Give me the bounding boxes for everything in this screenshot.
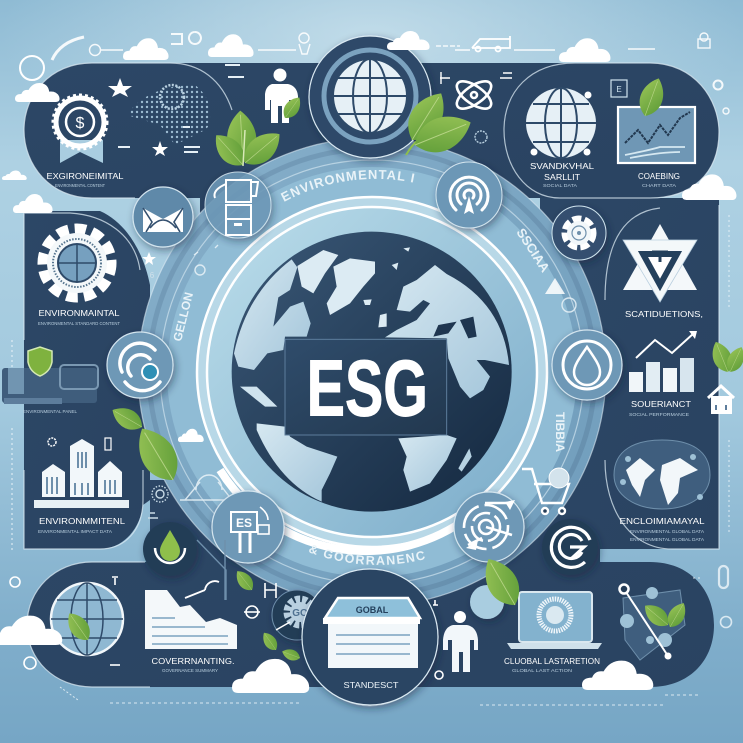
icon circle: G logo <box>542 519 598 575</box>
bottom center circle: building <box>302 569 438 705</box>
leaves: left <box>108 402 187 489</box>
sublabel: GOVERNANCE SUMMARY <box>162 668 218 673</box>
right small dashed decor <box>60 215 732 705</box>
continent: south america <box>257 423 337 502</box>
sublabel: ENVIRONMENTAL CONTENT <box>55 183 105 188</box>
dotted map <box>127 85 211 145</box>
speech bubble <box>470 585 504 619</box>
panel: bottom-left document chart <box>145 581 237 673</box>
continent: africa <box>398 435 457 492</box>
dark panel: top band with two pills <box>24 63 719 215</box>
panel: bottom-right network <box>620 584 685 660</box>
icon circle: badge <box>272 590 322 640</box>
icon circle: target <box>454 492 524 562</box>
ESG label: ESG <box>307 344 428 433</box>
panel: top-left content <box>46 65 244 188</box>
ring text: left: GELLON <box>170 291 196 343</box>
ring text: social: SSCIAA <box>513 225 553 275</box>
icon circle: envelope <box>133 187 193 247</box>
sublabel: ENVIRONMENTAL GLOBAL DATA <box>630 529 704 534</box>
label: SOUERIANCT <box>631 399 691 409</box>
leaf: chart <box>635 75 669 120</box>
label: CLUOBAL LASTARETION <box>504 656 600 666</box>
icon circle: wifi signal <box>436 162 502 228</box>
leaves: bottom small <box>232 567 302 663</box>
label: COAEBING <box>638 172 680 181</box>
leaves: top-right sprig <box>399 85 477 160</box>
device with shield <box>2 347 98 414</box>
label: SVANDKVHAL <box>530 162 595 171</box>
dark panel: left <box>24 211 150 549</box>
label: ENVIRONMMITENL <box>39 516 125 526</box>
ring text: environmental: ENVIRONMENTAL I <box>280 170 414 202</box>
label: EXGIRONEIMITAL <box>46 171 124 181</box>
sublabel: ENVIRONMENTAL STANDARD CONTENT <box>38 321 120 326</box>
icon: gear <box>44 230 110 296</box>
label line 2: SARLLIT <box>544 173 580 182</box>
top person <box>265 68 298 123</box>
icon circle: water drop ring <box>552 330 622 400</box>
ring faint icons <box>180 245 576 500</box>
icon: globe <box>526 88 596 158</box>
bottom center circle: building: GOBAL <box>356 605 389 615</box>
panel: top-right globe <box>526 88 596 188</box>
decorative top strip icons <box>52 32 729 114</box>
translucent outer ring <box>138 138 606 606</box>
ring text: governance: & GOORRANENC <box>309 545 425 565</box>
continent: north america <box>234 259 311 370</box>
ring text: right lower: TIBBIA <box>553 412 567 452</box>
leaves: top-left sprout <box>208 110 288 173</box>
continent: dark inland seas <box>433 317 477 338</box>
label: ENCLOIMIAMAYAL <box>620 516 705 526</box>
panel: right bar chart <box>629 331 697 417</box>
label: ENVIRONMAINTAL <box>38 308 120 318</box>
leaves: bottom-right <box>640 599 690 631</box>
continent: madagascar <box>458 448 472 472</box>
leaves: right edge <box>707 338 743 375</box>
dark panel: right <box>540 198 719 549</box>
label: COVERRNANTING. <box>152 656 234 666</box>
sublabel: ENVIRONMENTAL IMPACT DATA <box>38 529 112 534</box>
cloud in ring <box>178 429 204 442</box>
continent: greenland <box>327 258 375 315</box>
panel: bottom-left globe <box>51 583 123 655</box>
label: SCATIDUETIONS, <box>625 309 703 319</box>
continent: small islands <box>363 247 410 327</box>
leaf: globe <box>62 608 95 645</box>
sublabel 2: ENVIRONMENTAL GLOBAL DATA <box>630 537 704 542</box>
panel: left gear content: 6 <box>150 271 155 280</box>
sublabel: CHART DATA <box>642 183 676 188</box>
panel: top-right chart: E <box>616 85 622 94</box>
panel: right world map <box>614 440 710 542</box>
leaf: large bottom <box>476 552 528 612</box>
ESG label <box>285 339 447 435</box>
icon: star emblem <box>623 224 697 302</box>
device with shield: ENVIRONMENTAL PANEL <box>23 409 77 414</box>
icon circle: ESG sign <box>212 491 284 563</box>
icon circle: flower gear <box>552 206 606 260</box>
panel: laptop <box>504 592 602 673</box>
icon: dollar gear badge: $ <box>76 115 85 132</box>
panel: top-right chart <box>611 80 695 188</box>
icon circle: ESG sign: ES <box>236 516 252 530</box>
panel: left buildings <box>34 438 129 534</box>
icon circle: spiral <box>107 332 173 398</box>
truck icon <box>436 36 510 52</box>
dark panel: bottom <box>27 480 714 687</box>
continent: central america <box>240 387 277 407</box>
continent: arctic islands <box>297 250 338 293</box>
gear small <box>148 486 226 600</box>
bottom person <box>443 611 478 672</box>
sublabel: GLOBAL LAST ACTION <box>512 668 572 673</box>
icon: house <box>708 386 734 414</box>
globe <box>232 232 512 512</box>
top circle: globe <box>309 36 431 158</box>
bottom center circle: building: STANDESCT <box>344 680 398 690</box>
bright ring around globe <box>196 196 548 551</box>
icon: stars <box>108 78 168 156</box>
leaf: person <box>279 94 305 122</box>
panel: right star <box>623 224 703 319</box>
icon: shopping cart <box>522 468 569 514</box>
sublabel: SOCIAL PERFORMANCE <box>629 412 689 417</box>
icon circle: badge: GO <box>292 608 308 619</box>
continent: eurasia <box>385 265 509 398</box>
icon: atom knot <box>440 72 512 143</box>
icon: dollar gear badge <box>53 95 107 163</box>
bottom small glyphs <box>10 577 443 679</box>
icon circle: green drop <box>143 522 197 576</box>
panel: left gear content <box>12 230 156 553</box>
icon circle: tower box <box>205 172 271 238</box>
sublabel: SOCIAL DATA <box>543 183 577 188</box>
